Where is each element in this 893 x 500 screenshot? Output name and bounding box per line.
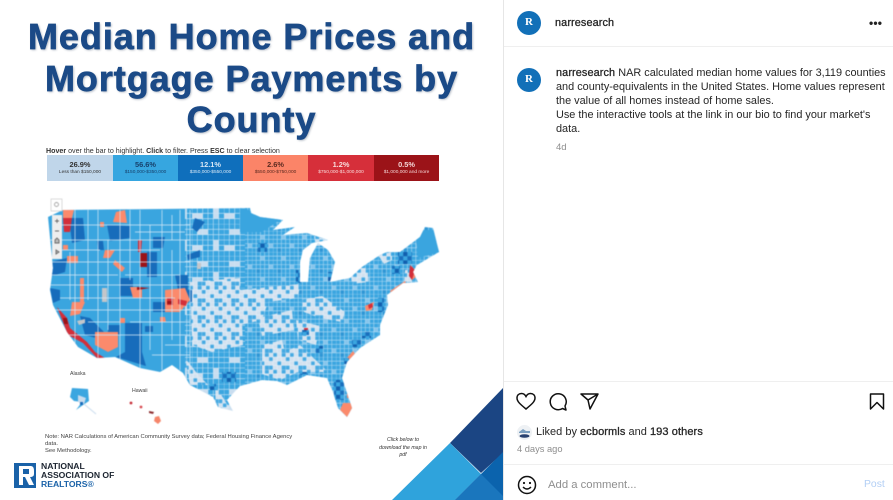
legend: 550k to 750k: $550,000-$750,000 <box>255 170 296 175</box>
caption text: narresearch NAR calculated median home values for 3,119 counties <box>556 67 886 79</box>
legend: 150k to 350k: $150,000-$350,000 <box>125 170 166 175</box>
note text: Note: NAR Calculations of American Community Survey data; Federal Housing Finance Agency <box>45 434 292 440</box>
download note: pdf <box>399 452 407 458</box>
Hawaii inset <box>130 402 161 424</box>
county choropleth map <box>47 198 440 424</box>
note text: data. <box>45 441 58 447</box>
title: Median Home Prices and <box>28 16 475 57</box>
legend: 150k to 350k: 56.6% <box>135 160 156 169</box>
comment divider <box>504 464 893 465</box>
note text: See Methodology. <box>45 448 92 454</box>
caption avatar <box>517 68 541 92</box>
NAR wordmark: NATIONAL <box>41 461 85 471</box>
high-value western counties <box>50 218 205 366</box>
eastern counties <box>245 205 445 425</box>
NAR wordmark <box>41 461 114 489</box>
panel divider <box>503 0 504 500</box>
western county boundaries <box>50 210 190 380</box>
icon: share <box>580 393 599 410</box>
likes text: Liked by ecbormls and 193 others <box>536 426 703 438</box>
icon: comment <box>549 393 567 411</box>
legend: 550k to 750k <box>243 155 308 181</box>
legend: less than 150k: Less than $150,000 <box>59 170 101 175</box>
post button: Post <box>864 479 885 490</box>
metro county clusters <box>210 243 412 400</box>
caption text: and county-equivalents in the United States. Home values represent <box>556 81 885 93</box>
contiguous US counties <box>40 200 445 425</box>
caption text: the value of all homes instead of home sales. <box>556 95 774 107</box>
base: western counties <box>47 208 190 384</box>
caption text: Use the interactive tools at the link in our bio to find your market's <box>556 109 870 121</box>
title: Mortgage Payments by <box>45 58 458 98</box>
icon: heart <box>516 392 536 410</box>
legend: 350k to 550k: 12.1% <box>200 160 221 169</box>
note text <box>45 434 292 454</box>
NAR wordmark: ASSOCIATION OF <box>41 470 114 480</box>
icon: smiley <box>518 476 536 494</box>
plains counties <box>185 205 250 420</box>
title: County <box>187 99 316 140</box>
more menu: ••• <box>869 16 882 30</box>
highest value counties <box>57 218 415 358</box>
header avatar: R <box>525 16 534 28</box>
counties without data <box>77 263 201 325</box>
caption text: data. <box>556 123 580 135</box>
legend: 750k to 1M <box>308 155 374 181</box>
mid-high value counties <box>63 210 417 417</box>
download note: download the map in <box>379 445 427 451</box>
download note: Click below to <box>387 437 419 443</box>
corner graphic <box>392 388 503 500</box>
legend: 350k to 550k: $350,000-$550,000 <box>190 170 231 175</box>
caption age: 4d <box>556 142 567 153</box>
title <box>28 16 475 142</box>
legend bar <box>47 155 439 181</box>
legend: less than 150k <box>47 155 113 181</box>
icon: bookmark <box>870 393 884 410</box>
post age: 4 days ago <box>517 444 562 454</box>
caption text <box>556 67 886 135</box>
lower-value county clusters <box>185 236 413 412</box>
header divider <box>504 46 893 47</box>
legend: 550k to 750k: 2.6% <box>267 160 284 169</box>
liker avatar <box>517 425 532 440</box>
label: Hawaii: Hawaii <box>132 388 148 394</box>
legend: 1M and more: $1,000,000 and more <box>384 170 429 175</box>
label: Alaska: Alaska <box>70 371 86 377</box>
legend: 350k to 550k <box>178 155 243 181</box>
legend: less than 150k: 26.9% <box>70 160 90 169</box>
caption avatar: R <box>525 73 534 85</box>
header avatar <box>517 11 541 35</box>
legend: 1M and more: 0.5% <box>398 160 415 169</box>
instruction text: Hover over the bar to highlight. Click to filter. Press ESC to clear selection <box>46 147 280 155</box>
NAR wordmark: REALTORS® <box>41 479 94 489</box>
legend: 150k to 350k <box>113 155 178 181</box>
header username: narresearch <box>555 17 614 29</box>
map toolbar <box>51 199 62 259</box>
Alaska inset <box>70 388 96 414</box>
actions divider <box>504 381 893 382</box>
comment input placeholder: Add a comment... <box>548 479 637 491</box>
million-dollar counties <box>63 253 172 324</box>
download note <box>379 437 427 458</box>
legend: 1M and more <box>374 155 439 181</box>
legend: 750k to 1M: $750,000-$1,000,000 <box>318 170 364 175</box>
NAR logo mark <box>14 463 36 488</box>
legend: 750k to 1M: 1.2% <box>333 160 349 169</box>
Minnesota and Maine solid counties <box>240 208 440 258</box>
